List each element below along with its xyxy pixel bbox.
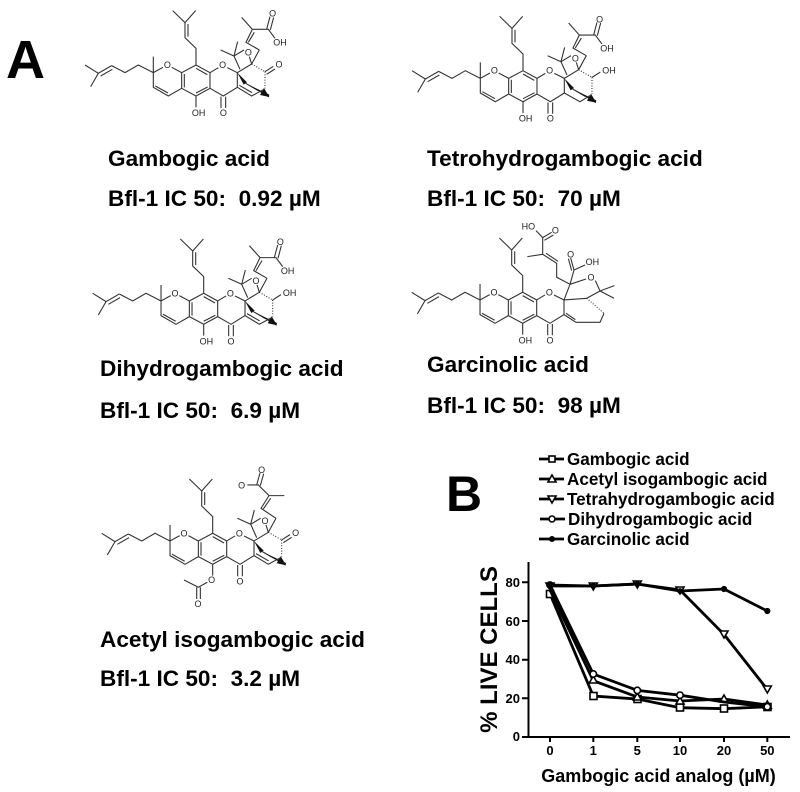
x tick labels: 20 — [717, 743, 731, 758]
structure: gambogic acid: O — [269, 9, 276, 19]
structure: tetrahydrogambogic acid: O — [546, 66, 553, 76]
structure: garcinolic acid: O — [552, 225, 559, 235]
structure: garcinolic acid: O — [491, 287, 498, 297]
chart legend — [539, 450, 775, 549]
x tick labels: 0 — [546, 743, 554, 758]
structure: tetrahydrogambogic acid: O — [572, 53, 579, 63]
x tick labels: 1 — [590, 743, 597, 758]
y tick labels: 80 — [506, 575, 520, 590]
x tick labels — [546, 743, 775, 758]
panel label A: A — [6, 30, 45, 90]
structure: garcinolic acid: HO — [522, 221, 535, 231]
legend: gambogic acid: Gambogic acid — [567, 450, 690, 469]
structure: acetyl isogambogic acid: O — [208, 575, 215, 585]
name: dihydrogambogic acid: Dihydrogambogic acid — [100, 356, 344, 381]
y axis title: % LIVE CELLS — [476, 566, 503, 733]
name: acetyl isogambogic acid: Acetyl isogambogic acid — [100, 627, 365, 652]
structure: dihydrogambogic acid: O — [172, 288, 179, 298]
structure: dihydrogambogic acid: OH — [200, 336, 213, 346]
structure: gambogic acid: O — [164, 60, 171, 70]
IC50: garcinolic acid: Bfl-1 IC 50: 98 µM — [427, 393, 621, 418]
structure: dihydrogambogic acid: O — [277, 237, 284, 247]
structure: garcinolic acid: OH — [519, 335, 532, 345]
name: tetrohydrogambogic acid: Tetrohydrogambogic acid — [427, 146, 703, 171]
structure: acetyl isogambogic acid — [102, 465, 299, 609]
structure: gambogic acid: OH — [273, 38, 287, 48]
structure: garcinolic acid: O — [588, 272, 595, 282]
y tick labels: 60 — [506, 614, 520, 629]
structure: acetyl isogambogic acid: O — [195, 599, 202, 609]
structure: garcinolic acid: O — [547, 335, 554, 345]
structure: acetyl isogambogic acid: O — [236, 528, 243, 538]
IC50: gambogic acid: Bfl-1 IC 50: 0.92 µM — [108, 186, 321, 211]
legend: garcinolic acid: Garcinolic acid — [567, 530, 690, 549]
x tick labels: 10 — [673, 743, 687, 758]
structure: garcinolic acid — [412, 221, 614, 345]
structure: garcinolic acid: O — [567, 249, 574, 259]
IC50: acetyl isogambogic acid: Bfl-1 IC 50: 3.2 µM — [100, 666, 300, 691]
IC50: dihydrogambogic acid: Bfl-1 IC 50: 6.9 µM — [100, 398, 300, 423]
legend: acetyl isogambogic acid: Acetyl isogambogic acid — [567, 470, 767, 489]
structure: tetrahydrogambogic acid: OH — [519, 114, 532, 124]
y tick labels: 0 — [513, 729, 520, 744]
y tick labels: 40 — [506, 652, 520, 667]
y tick labels — [506, 575, 520, 744]
name: gambogic acid: Gambogic acid — [108, 146, 270, 171]
structure: acetyl isogambogic acid: O — [258, 465, 265, 475]
legend: dihydrogambogic acid: Dihydrogambogic acid — [568, 510, 752, 529]
structure: gambogic acid — [85, 9, 287, 118]
structure: dihydrogambogic acid: O — [228, 336, 235, 346]
series: gambogic acid — [546, 590, 771, 712]
structure: gambogic acid: O — [245, 48, 252, 58]
structure: tetrahydrogambogic acid: OH — [602, 65, 616, 75]
IC50: tetrohydrogambogic acid: Bfl-1 IC 50: 70 µM — [427, 186, 621, 211]
structure: tetrahydrogambogic acid: O — [547, 114, 554, 124]
structure: gambogic acid: O — [275, 60, 282, 70]
series: garcinolic acid — [547, 582, 770, 614]
structure: dihydrogambogic acid: OH — [283, 288, 296, 298]
x axis title: Gambogic acid analog (µM) — [541, 766, 776, 786]
structure: acetyl isogambogic acid: O — [292, 528, 299, 538]
panel label B: B — [446, 466, 482, 522]
structure: dihydrogambogic acid — [93, 237, 296, 346]
structure: dihydrogambogic acid: O — [227, 288, 234, 298]
structure: tetrahydrogambogic acid — [412, 14, 616, 124]
y tick labels: 20 — [506, 691, 520, 706]
structure: acetyl isogambogic acid: O — [238, 480, 245, 490]
structure: dihydrogambogic acid: O — [253, 276, 260, 286]
legend: tetrahydrogambogic acid: Tetrahydrogambogic acid — [567, 490, 775, 509]
structure: tetrahydrogambogic acid: O — [596, 14, 603, 24]
axes — [522, 562, 790, 742]
line chart: percent live cells — [476, 562, 790, 786]
structure: garcinolic acid: O — [546, 287, 553, 297]
series: tetrahydrogambogic acid — [546, 581, 771, 693]
structure: tetrahydrogambogic acid: O — [491, 66, 498, 76]
series: dihydrogambogic acid — [550, 585, 770, 710]
structure: gambogic acid: OH — [192, 108, 205, 118]
structure: garcinolic acid: OH — [586, 257, 599, 267]
name: garcinolic acid: Garcinolic acid — [427, 352, 589, 377]
structure: dihydrogambogic acid: OH — [281, 266, 294, 276]
structure: gambogic acid: O — [219, 60, 226, 70]
series: acetyl isogambogic acid — [550, 590, 771, 708]
structure: acetyl isogambogic acid: O — [237, 576, 244, 586]
x tick labels: 5 — [634, 743, 641, 758]
structure: acetyl isogambogic acid: O — [181, 528, 188, 538]
structure: tetrahydrogambogic acid: OH — [600, 43, 614, 53]
x tick labels: 50 — [760, 743, 775, 758]
structure: gambogic acid: O — [220, 108, 227, 118]
structure: acetyl isogambogic acid: O — [262, 516, 269, 526]
